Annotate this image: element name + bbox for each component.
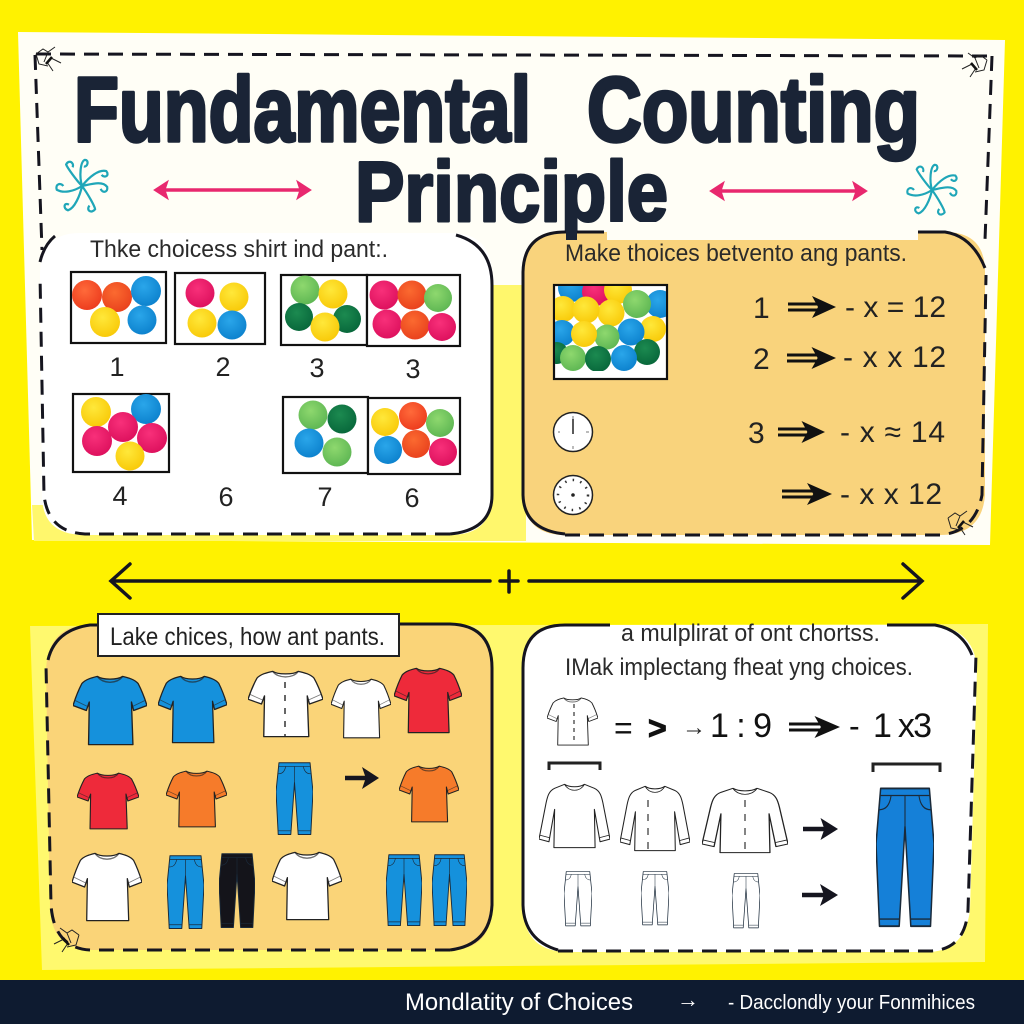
panel heading: Thke choicess shirt ind pant:. xyxy=(90,236,388,263)
white shirt 4 xyxy=(272,852,342,920)
equation row 1: - x = 12 xyxy=(845,291,946,324)
icon: left flower xyxy=(56,160,108,211)
footer tagline: - Dacclondly your Fonmihices xyxy=(728,992,975,1014)
ball box 6 xyxy=(283,397,368,473)
arrow: right pink double arrow xyxy=(710,182,867,200)
panel: top right equations xyxy=(523,222,986,535)
equation row 1 xyxy=(753,291,946,325)
ball box 3 xyxy=(281,275,367,345)
equation row 4: - x x 12 xyxy=(840,478,942,511)
equation row 2: - x x 12 xyxy=(843,341,946,374)
jeans 3 xyxy=(386,855,422,926)
footer arrow: → xyxy=(677,987,699,1012)
equation: - xyxy=(849,708,860,744)
panel: bottom left clothes xyxy=(46,614,492,952)
equation row 1: 1 xyxy=(753,292,770,325)
icon: clock 2 xyxy=(554,476,592,514)
arrow to big jeans 2 xyxy=(802,884,838,906)
icon: clock 1 xyxy=(554,412,592,452)
equation row 2: 2 xyxy=(753,343,770,376)
white strip below title xyxy=(607,222,918,240)
number labels: 6 xyxy=(218,482,234,512)
equation xyxy=(614,707,932,746)
number labels: 3 xyxy=(405,354,421,384)
lower paper sheet xyxy=(30,624,988,970)
long sleeve 3 xyxy=(702,788,788,853)
number labels: 7 xyxy=(317,482,333,512)
number labels: 1 xyxy=(109,352,125,382)
corner scribble top right xyxy=(962,53,987,77)
number labels: 2 xyxy=(215,352,231,382)
bracket right xyxy=(873,764,940,772)
long sleeve 1 xyxy=(539,784,610,848)
orange shirt 2 xyxy=(399,766,459,822)
big jeans xyxy=(876,788,934,926)
footer bar xyxy=(0,980,1024,1024)
equation: → xyxy=(682,714,706,741)
pale yellow paper strip between upper panels xyxy=(32,285,526,541)
equation row 3: 3 xyxy=(748,417,765,450)
equation row 4 xyxy=(782,478,942,511)
corner scribble bottom left xyxy=(54,928,79,952)
small pants 2 xyxy=(641,872,669,925)
equation: 1 x3 xyxy=(873,707,932,745)
orange shirt 1 xyxy=(166,771,227,827)
corner scribble bottom right xyxy=(948,511,973,535)
jeans 4 xyxy=(432,855,467,926)
small shirt xyxy=(547,698,598,745)
small pants 3 xyxy=(732,874,760,928)
title line 1 word 1: Fundamental xyxy=(74,59,531,161)
red shirt 1 xyxy=(394,668,462,733)
ball box 2 xyxy=(175,273,265,344)
number labels: 3 xyxy=(309,353,325,383)
arrow: central double arrow with plus xyxy=(111,564,922,598)
outer dashed border xyxy=(35,54,992,250)
corner scribble top left xyxy=(36,47,61,71)
title line 2: Principle xyxy=(355,145,668,240)
equation row 3 xyxy=(748,416,945,450)
icon: right flower xyxy=(907,165,957,215)
arrow to big jeans 1 xyxy=(803,818,838,840)
ball box xyxy=(552,284,668,380)
panel: top left ball groups xyxy=(40,233,492,535)
white shirt 3 xyxy=(72,853,142,921)
panel background xyxy=(523,232,985,535)
jeans 1 xyxy=(276,763,313,835)
ball box 7 xyxy=(368,398,460,474)
white shirt 2 xyxy=(331,679,391,738)
arrow: left pink double arrow xyxy=(154,181,311,199)
long sleeve 2 xyxy=(620,786,690,851)
panel background xyxy=(523,625,977,952)
equation row 3: - x ≈ 14 xyxy=(840,416,945,449)
white button shirt xyxy=(248,671,323,737)
jeans 2 xyxy=(167,856,204,928)
ball box 4 xyxy=(367,275,460,346)
bracket left xyxy=(549,763,600,770)
panel heading: Make thoices betvento ang pants. xyxy=(565,240,907,267)
panel background xyxy=(46,625,492,950)
red shirt 2 xyxy=(77,773,139,829)
equation: = xyxy=(614,710,633,746)
number labels xyxy=(109,352,421,513)
blue shirt 1 xyxy=(73,676,147,745)
plus sign xyxy=(500,571,518,592)
number labels: 4 xyxy=(112,481,128,511)
equation row 2 xyxy=(753,341,946,376)
heading line 2: IMak implectang fheat yng choices. xyxy=(565,654,913,681)
equation: > xyxy=(648,710,667,746)
heading line 1: a mulplirat of ont chortss. xyxy=(621,620,880,647)
blue shirt 2 xyxy=(158,676,227,743)
footer title: Mondlatity of Choices xyxy=(405,989,633,1016)
heading box xyxy=(98,614,399,656)
title line 1 word 2: Counting xyxy=(587,59,920,161)
upper paper sheet xyxy=(18,32,1005,545)
black pants xyxy=(219,854,255,927)
equation: 1 : 9 xyxy=(710,707,772,745)
small pants 1 xyxy=(564,872,592,926)
panel: bottom right multiplication xyxy=(523,620,977,952)
number labels: 6 xyxy=(404,483,420,513)
ball box 1 xyxy=(71,272,166,343)
heading box: Lake chices, how ant pants. xyxy=(110,623,385,651)
title xyxy=(74,59,920,240)
arrow xyxy=(345,767,379,789)
ball box 5 xyxy=(73,394,169,472)
panel background xyxy=(40,233,492,535)
redraw of title descender xyxy=(566,226,577,240)
